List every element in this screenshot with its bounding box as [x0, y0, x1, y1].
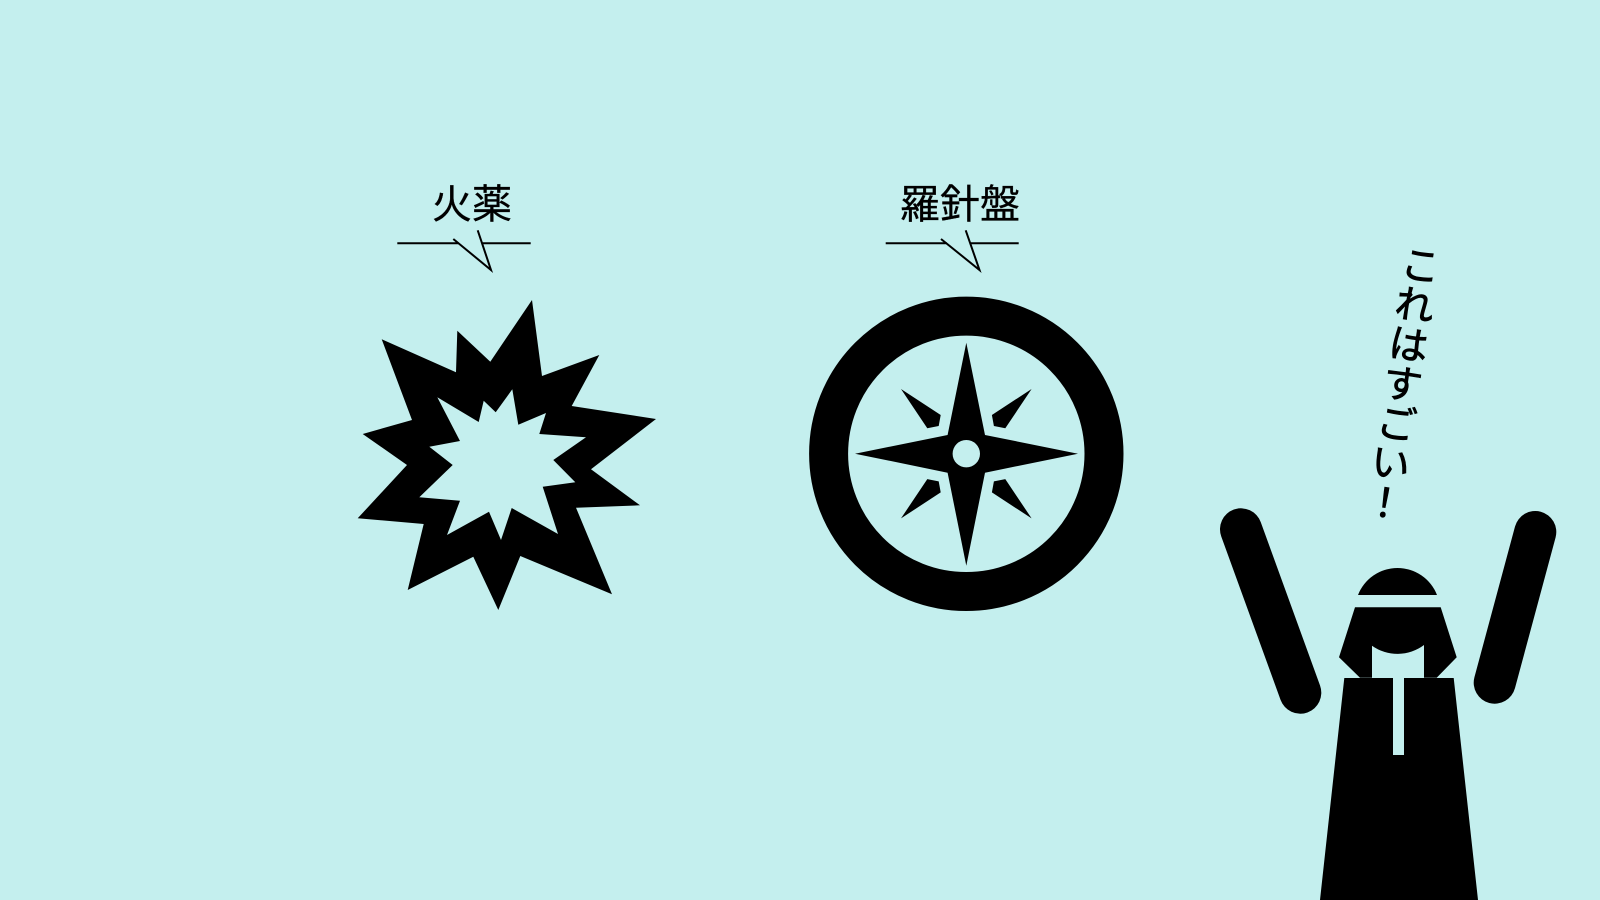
right arm: [1495, 532, 1535, 683]
left arm: [1241, 529, 1300, 693]
heading: compass label with callout: [886, 183, 1020, 270]
label: 羅針盤: 羅針盤: [900, 183, 1020, 227]
figure: person with raised arms: [1241, 529, 1535, 900]
icon: compass: [829, 316, 1104, 592]
speech text: これはすごい!: これはすごい！: [1353, 241, 1453, 526]
robe: [1320, 678, 1478, 900]
label: 火薬: 火薬: [432, 183, 512, 227]
hood: [1339, 607, 1457, 678]
heading: gunpowder label with callout: [397, 183, 531, 270]
icon: explosion burst: [358, 300, 656, 610]
compass ring: [829, 316, 1104, 592]
callout line: gunpowder: [397, 230, 531, 270]
compass star with centre hole: [855, 343, 1078, 566]
compass diagonal points: [901, 389, 1032, 518]
head: [1358, 568, 1437, 595]
callout line: compass: [886, 230, 1019, 270]
